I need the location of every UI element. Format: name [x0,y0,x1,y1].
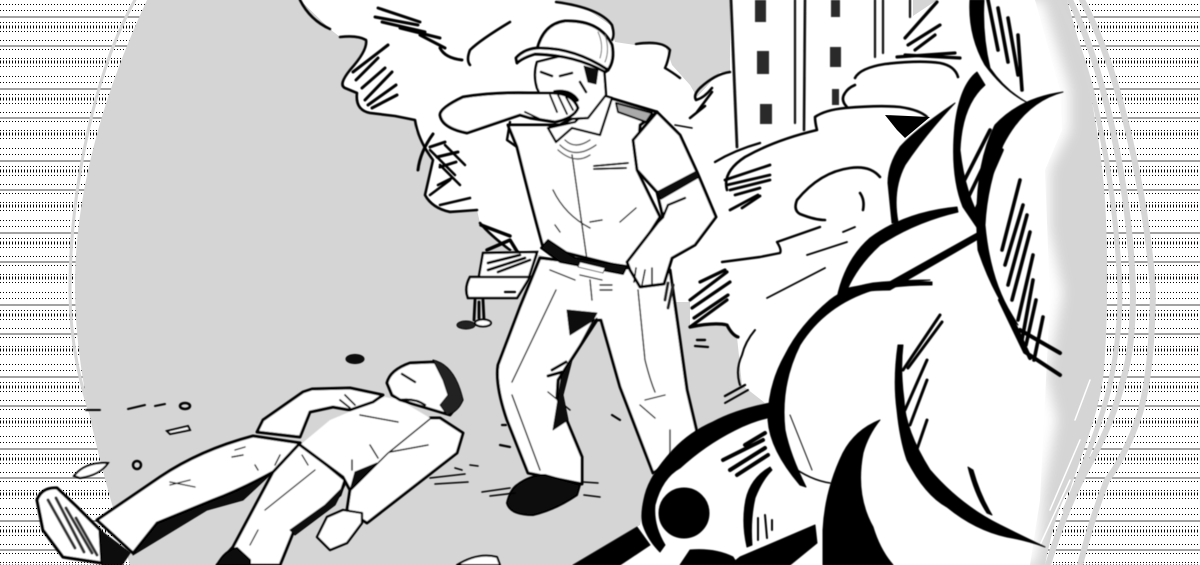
dense hatching [723,0,1060,540]
black coil at the bottom [642,403,772,552]
billow arcs [970,0,1028,103]
foreground billowing smoke with heavy ink strokes [457,0,1063,565]
cap [537,21,613,70]
dark smoke fold behind the building [885,115,930,138]
right arm [627,112,716,287]
belt [541,240,627,274]
hand on the ground [317,510,362,550]
standing man in cap covering his nose [440,21,716,515]
front leg [97,436,300,553]
smoke outlines and hatching [300,0,960,396]
shoe [507,475,580,515]
trousers [497,258,700,484]
right arm sleeve [347,418,463,523]
collar [548,95,612,142]
rear leg [217,443,345,565]
forearm and fist [440,93,578,133]
shoulder strap and shirt details [616,103,652,122]
neck and face [535,55,606,120]
head [387,362,462,415]
torso [300,397,430,490]
smoke cloud [300,0,1070,565]
shoe sole [37,488,102,563]
bench [457,252,537,329]
arm on chest [257,388,383,437]
building [731,0,910,147]
torso [508,98,660,268]
person lying unconscious on the ground [37,360,463,565]
debris on the ground [74,292,748,497]
second shoe [217,548,250,565]
shadow between legs [133,472,273,555]
